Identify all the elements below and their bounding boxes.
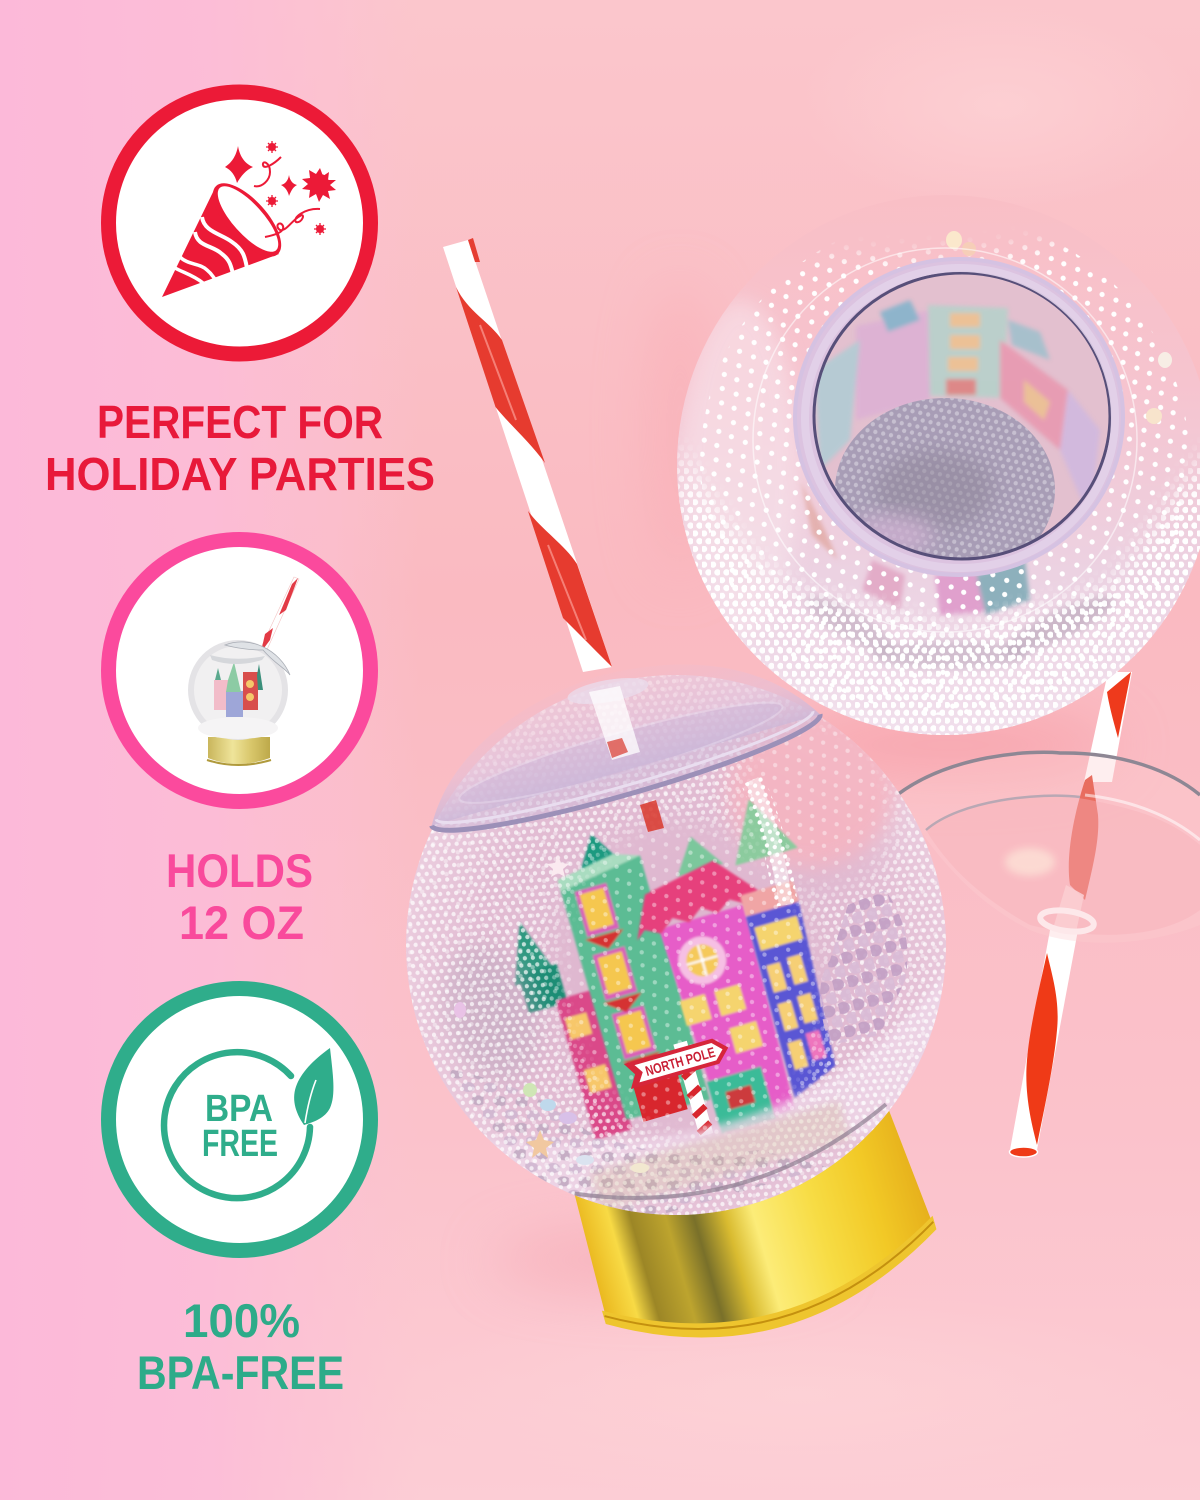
green building <box>555 847 710 1123</box>
icon: BPA free ring and leaf: BPA <box>205 1088 273 1130</box>
dark neck above base <box>574 1102 888 1200</box>
scalloped pink roof <box>636 859 758 940</box>
icon: BPA free ring and leaf: FREE <box>202 1123 278 1165</box>
glitter coins <box>946 231 1172 424</box>
badge: red ring <box>108 92 370 354</box>
snow globe: open, seen from the top <box>677 231 1200 735</box>
sequin cluster right side of front globe <box>820 890 908 1045</box>
red door and candy pole <box>634 1040 713 1136</box>
straw collar on lid <box>566 673 650 760</box>
lid: removed clear lid at right <box>897 752 1200 943</box>
snow drift at bottom of the globe <box>491 978 944 1209</box>
cup interior <box>816 274 1108 558</box>
lid of the front globe <box>405 620 827 849</box>
panel: perfect for holiday parties <box>45 92 435 500</box>
blue building <box>739 880 837 1098</box>
label: HOLDS <box>166 844 313 897</box>
lid inner ring <box>454 687 788 818</box>
North Pole sign <box>624 1035 732 1089</box>
village inside the globe <box>406 675 946 1215</box>
snow globe: front, with gold base and village <box>406 675 946 1338</box>
straw below the lid, seen through the globe <box>640 800 664 832</box>
beads on the back globe <box>670 190 1200 750</box>
label line two: 12 OZ <box>179 896 304 949</box>
shadows under the globes <box>490 280 1120 1290</box>
globe body <box>342 611 1010 1279</box>
colourful sequins <box>454 855 649 1173</box>
North Pole sign: NORTH POLE <box>643 1044 717 1079</box>
icon: BPA free ring and leaf <box>164 1048 333 1198</box>
panel: holds 12 oz <box>108 540 370 949</box>
snow column behind village <box>752 780 786 905</box>
falling snow beads <box>406 675 946 1215</box>
inner ring of the globe <box>753 248 1137 632</box>
lid rim <box>430 710 827 849</box>
label: 100% <box>183 1294 300 1347</box>
straw: front, red and white <box>443 238 612 672</box>
checker building <box>556 990 632 1140</box>
lid dome <box>405 620 820 826</box>
icon: party popper <box>162 141 336 297</box>
trees <box>514 799 798 1014</box>
straw: right, behind lid <box>1010 672 1132 1157</box>
gold base <box>567 1095 950 1373</box>
heading: PERFECT FOR <box>97 396 383 448</box>
heading line two: HOLIDAY PARTIES <box>45 448 435 500</box>
sequins left and bottom <box>450 1070 826 1214</box>
badge: green ring <box>108 988 370 1250</box>
badge: pink ring <box>108 540 370 802</box>
salmon translucency upper right <box>726 716 900 868</box>
panel: 100% BPA-free <box>108 988 370 1399</box>
pink building <box>659 905 803 1136</box>
icon: mini snow globe with straw <box>188 577 299 765</box>
building reflections below the cup <box>800 480 1030 615</box>
label line two: BPA-FREE <box>137 1346 344 1399</box>
cup wall and rim <box>795 259 1123 575</box>
